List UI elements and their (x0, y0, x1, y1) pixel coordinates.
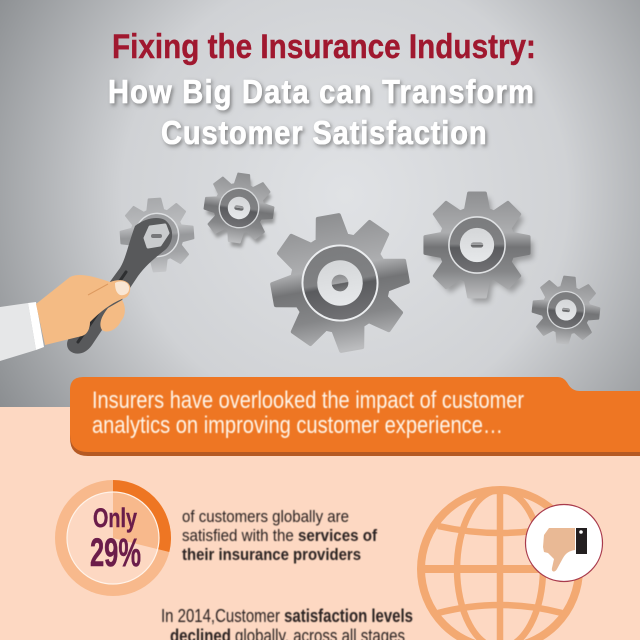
text block: customer satisfaction statement (182, 508, 377, 564)
thumbs down hand (543, 528, 575, 572)
palm and thumb (36, 275, 130, 345)
icon: hand holding wrench (0, 275, 130, 361)
title line: Customer Satisfaction: Customer Satisfaction (161, 114, 487, 151)
title line: How Big Data can Transform: How Big Data can Transform (108, 73, 534, 110)
cuff button (579, 530, 583, 534)
text block: 2014 decline statement (161, 606, 413, 640)
thumbnail (115, 281, 129, 295)
icon: medium right gear (425, 193, 533, 302)
text block: customer satisfaction statement: satisfied with the services of (182, 527, 377, 545)
donut orange segment (113, 480, 171, 552)
icon: thumbs down badge (526, 504, 602, 582)
text block: customer satisfaction statement: their insurance providers (182, 546, 361, 564)
icon: wrench (67, 218, 172, 354)
donut inner segment (113, 493, 158, 549)
banner bottom edge (70, 381, 640, 456)
callout: orange banner (70, 377, 640, 456)
icon: gear behind wrench (119, 197, 195, 273)
title line: red heading: Fixing the Insurance Industry: (112, 27, 536, 65)
fingers (100, 300, 125, 332)
icon: large centre gear (262, 205, 418, 361)
shirt cuff (28, 302, 44, 350)
banner text line 2: analytics on improving customer experience… (92, 412, 503, 439)
shirt sleeve (0, 303, 36, 361)
label: Only: Only (93, 503, 137, 533)
icon: small right gear (530, 274, 602, 346)
chart: 29% donut (55, 480, 171, 596)
banner body (70, 377, 640, 452)
text block: 2014 decline statement: In 2014,Customer satisfaction levels (161, 606, 413, 626)
cuff (576, 528, 587, 554)
banner text line 1: Insurers have overlooked the impact of customer (92, 387, 524, 414)
badge circle (526, 504, 602, 582)
icon: small top gear (200, 170, 280, 251)
icon: globe (421, 490, 579, 640)
donut inner disc (67, 492, 159, 584)
donut track (55, 480, 171, 596)
label: 29%: 29% (90, 531, 141, 575)
text block: customer satisfaction statement: of customers globally are (182, 508, 349, 526)
title (108, 27, 536, 151)
thumb crease (88, 284, 108, 295)
panel: grey hero background (0, 0, 640, 407)
